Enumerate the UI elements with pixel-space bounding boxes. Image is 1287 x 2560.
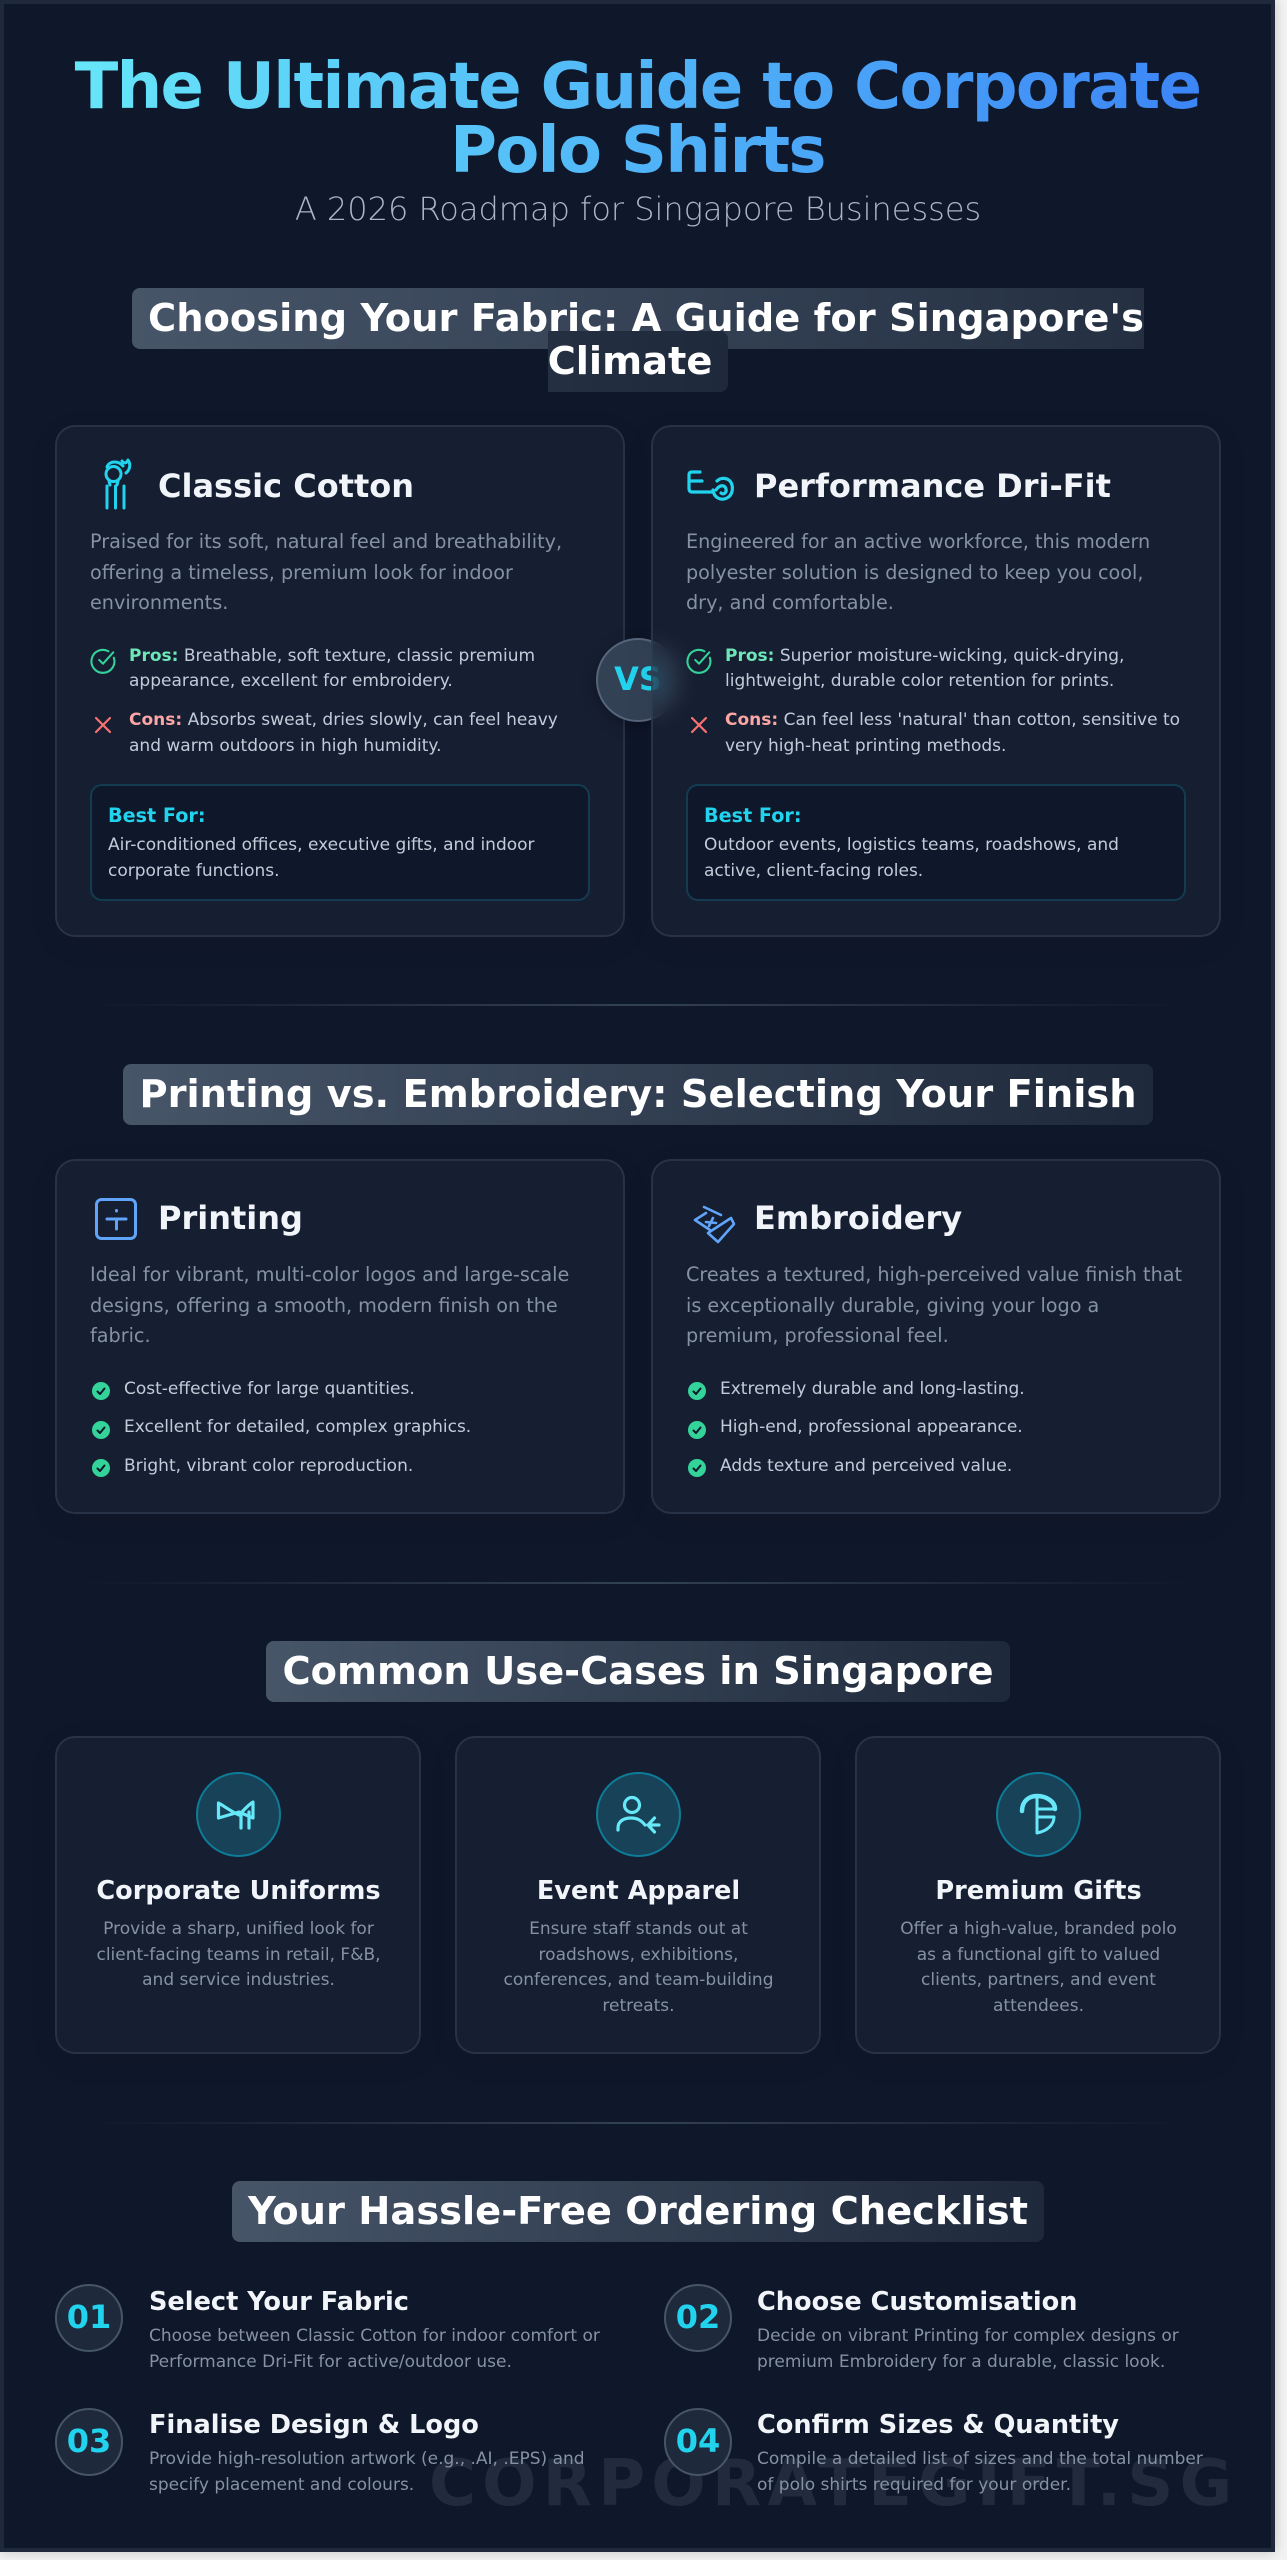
panel: classic cotton	[55, 425, 625, 937]
cotton title: Classic Cotton	[158, 467, 414, 505]
premium gifts text: clients, partners, and event	[921, 1970, 1156, 1990]
premium gifts text: as a functional gift to valued	[917, 1945, 1160, 1965]
event apparel title: Event Apparel	[537, 1876, 740, 1906]
event apparel text: retreats.	[602, 1996, 675, 2016]
dri-fit title: Performance Dri-Fit	[754, 467, 1111, 505]
embroidery description	[686, 1263, 1182, 1347]
corporate uniforms title: Corporate Uniforms	[96, 1876, 381, 1906]
cotton best for text: Air-conditioned offices, executive gifts, and indoor	[108, 835, 535, 855]
step 03 number: 03	[67, 2422, 111, 2460]
dri-fit best for box	[686, 784, 1186, 901]
heading: choosing your fabric: Climate	[548, 339, 712, 384]
heading: use-cases: Common Use-Cases in Singapore	[282, 1649, 994, 1694]
panel: corporate uniforms	[55, 1736, 421, 2054]
panel: printing	[55, 1159, 625, 1514]
dri-fit pros: lightweight, durable color retention for prints.	[725, 671, 1114, 691]
panel: event apparel	[455, 1736, 821, 2054]
step 01 title: Select Your Fabric	[149, 2287, 409, 2317]
step 01 number: 01	[67, 2298, 111, 2336]
heading: checklist: Your Hassle-Free Ordering Checklist	[248, 2189, 1028, 2234]
cotton best for text: corporate functions.	[108, 861, 280, 881]
dri-fit description: dry, and comfortable.	[686, 591, 894, 614]
printing description: fabric.	[90, 1324, 151, 1347]
title: Polo Shirts	[450, 114, 825, 188]
corporate uniforms text: client-facing teams in retail, F&B,	[96, 1945, 381, 1965]
title	[60, 55, 1215, 183]
premium gifts text: Offer a high-value, branded polo	[900, 1919, 1177, 1939]
printing description: Ideal for vibrant, multi-color logos and large-scale	[90, 1263, 569, 1286]
cotton pros: appearance, excellent for embroidery.	[129, 671, 453, 691]
embroidery benefit 3: Adds texture and perceived value.	[720, 1456, 1012, 1476]
panel: embroidery	[651, 1159, 1221, 1514]
cotton description: offering a timeless, premium look for indoor	[90, 560, 513, 584]
step 02 title: Choose Customisation	[757, 2287, 1077, 2317]
heading: choosing your fabric: Choosing Your Fabric: A Guide for Singapore's	[148, 296, 1144, 341]
VS badge: VS	[614, 660, 662, 698]
subtitle: A 2026 Roadmap for Singapore Businesses	[295, 190, 981, 228]
dri-fit best for text	[704, 835, 1119, 881]
cotton best for label: Best For:	[108, 804, 206, 827]
dri-fit cons: Cons: Can feel less 'natural' than cotton, sensitive to	[725, 710, 1180, 730]
step 04 number: 04	[676, 2422, 720, 2460]
dri-fit description: Engineered for an active workforce, this modern	[686, 530, 1150, 553]
step 03 text: specify placement and colours.	[149, 2475, 414, 2495]
printing benefit 1: Cost-effective for large quantities.	[124, 1379, 415, 1399]
embroidery description: premium, professional feel.	[686, 1324, 949, 1347]
embroidery benefit 2: High-end, professional appearance.	[720, 1417, 1023, 1437]
dri-fit pros: Pros: Superior moisture-wicking, quick-drying,	[725, 646, 1124, 666]
dri-fit best for text: active, client-facing roles.	[704, 861, 923, 881]
panel: performance dri-fit	[651, 425, 1221, 937]
icon: pros check	[686, 648, 712, 674]
printing benefit 3: Bright, vibrant color reproduction.	[124, 1456, 413, 1476]
dri-fit pros	[725, 646, 1124, 691]
embroidery description: Creates a textured, high-perceived value finish that	[686, 1263, 1182, 1286]
step 04 text	[757, 2449, 1203, 2495]
step 04 number	[664, 2408, 732, 2476]
panel: premium gifts	[855, 1736, 1221, 2054]
premium gifts title: Premium Gifts	[935, 1876, 1142, 1906]
icon: printing	[95, 1198, 137, 1240]
step 01 text: Performance Dri-Fit for active/outdoor use.	[149, 2352, 512, 2372]
embroidery benefit 1: Extremely durable and long-lasting.	[720, 1379, 1025, 1399]
step 02 number	[664, 2284, 732, 2352]
dri-fit description	[686, 530, 1150, 614]
step 01 number	[55, 2284, 123, 2352]
VS badge	[596, 638, 680, 722]
step 03 number	[55, 2408, 123, 2476]
printing description	[90, 1263, 569, 1347]
dri-fit cons	[725, 710, 1180, 756]
watermark: CORPORATEGIFT.SG	[429, 2447, 1238, 2521]
heading: printing vs embroidery: Printing vs. Embroidery: Selecting Your Finish	[139, 1072, 1137, 1117]
step 02 text	[757, 2326, 1179, 2372]
cotton description	[90, 530, 562, 614]
icon: bow tie	[196, 1772, 281, 1857]
step 01 text: Choose between Classic Cotton for indoor comfort or	[149, 2326, 600, 2346]
icon: gift	[996, 1772, 1081, 1857]
event apparel text: roadshows, exhibitions,	[539, 1945, 738, 1965]
corporate uniforms text: and service industries.	[142, 1970, 335, 1990]
premium gifts text: attendees.	[993, 1996, 1084, 2016]
step 03 title: Finalise Design & Logo	[149, 2410, 479, 2440]
step 02 number: 02	[676, 2298, 720, 2336]
heading: choosing your fabric	[132, 288, 1144, 392]
step 01 text	[149, 2326, 600, 2372]
step 04 text: of polo shirts required for your order.	[757, 2475, 1071, 2495]
dri-fit best for text: Outdoor events, logistics teams, roadshows, and	[704, 835, 1119, 855]
step 04 text: Compile a detailed list of sizes and the total number	[757, 2449, 1203, 2469]
icon: embroidery	[694, 1206, 736, 1244]
icon: cotton	[104, 458, 132, 510]
dri-fit best for label: Best For:	[704, 804, 802, 827]
event apparel text: Ensure staff stands out at	[529, 1919, 748, 1939]
icon: person with arrow	[596, 1772, 681, 1857]
cotton best for text	[108, 835, 535, 881]
cotton description: Praised for its soft, natural feel and breathability,	[90, 530, 562, 553]
cotton pros	[129, 646, 535, 691]
cotton best for box	[90, 784, 590, 901]
cotton cons	[129, 710, 558, 756]
icon: cons cross	[94, 716, 112, 734]
event apparel text	[504, 1919, 774, 2016]
cotton cons: Cons: Absorbs sweat, dries slowly, can feel heavy	[129, 710, 558, 730]
step 02 text: premium Embroidery for a durable, classic look.	[757, 2352, 1165, 2372]
step 04 title: Confirm Sizes & Quantity	[757, 2410, 1119, 2440]
cotton cons: and warm outdoors in high humidity.	[129, 736, 441, 756]
corporate uniforms text: Provide a sharp, unified look for	[103, 1919, 374, 1939]
printing title: Printing	[158, 1199, 303, 1237]
cotton pros: Pros: Breathable, soft texture, classic premium	[129, 646, 535, 666]
cotton description: environments.	[90, 591, 228, 614]
printing benefit 2: Excellent for detailed, complex graphics.	[124, 1417, 471, 1437]
embroidery title: Embroidery	[754, 1199, 962, 1237]
icon: dri-fit	[687, 470, 734, 501]
embroidery description: is exceptionally durable, giving your logo a	[686, 1294, 1099, 1316]
event apparel text: conferences, and team-building	[504, 1970, 774, 1990]
title: The Ultimate Guide to Corporate	[75, 50, 1200, 124]
premium gifts text	[900, 1919, 1177, 2016]
icon: pros check	[90, 648, 116, 674]
corporate uniforms text	[96, 1919, 381, 1990]
icon: cons cross	[690, 716, 708, 734]
step 02 text: Decide on vibrant Printing for complex designs or	[757, 2326, 1179, 2346]
dri-fit description: polyester solution is designed to keep you cool,	[686, 560, 1143, 584]
printing description: designs, offering a smooth, modern finish on the	[90, 1294, 558, 1316]
step 03 text: Provide high-resolution artwork (e.g., .AI, .EPS) and	[149, 2449, 585, 2469]
step 03 text	[149, 2449, 585, 2495]
dri-fit cons: very high-heat printing methods.	[725, 736, 1006, 756]
